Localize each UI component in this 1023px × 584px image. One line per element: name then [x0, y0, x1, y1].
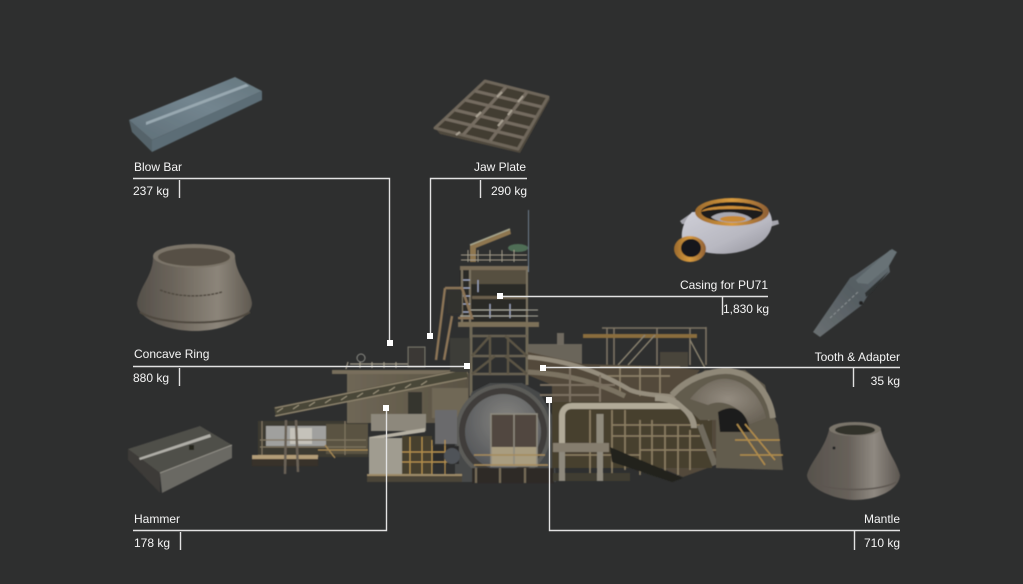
- white container buildings: [367, 414, 462, 482]
- icon: jaw plate: [435, 81, 550, 153]
- item: hammer: 178 kg: [134, 536, 170, 550]
- right ball mill: [672, 370, 783, 470]
- inclined conveyor: [275, 369, 467, 416]
- primary tower: [436, 210, 539, 396]
- left conveyor-side building and base: [252, 420, 368, 474]
- item: blow bar: Blow Bar: [134, 160, 182, 174]
- item: mantle: Mantle: [864, 512, 900, 526]
- item: tooth and adapter: [813, 249, 900, 388]
- icon: hammer: [128, 426, 232, 493]
- upper right structure: [528, 327, 706, 368]
- item: hammer: [128, 426, 232, 550]
- item: concave ring: 880 kg: [133, 371, 169, 385]
- icon: tooth and adapter: [813, 249, 897, 337]
- leader lines: [133, 178, 900, 550]
- icon: pump casing: [674, 198, 779, 262]
- item: casing for PU71: [674, 198, 779, 316]
- item: hammer: Hammer: [134, 512, 180, 526]
- item: jaw plate: 290 kg: [491, 184, 527, 198]
- tan bin building under deck: [332, 347, 469, 423]
- icon: mantle: [807, 422, 900, 500]
- central ball mill: [429, 383, 556, 483]
- icon: concave ring: [137, 244, 252, 331]
- item: concave ring: [133, 244, 252, 385]
- item: jaw plate: [435, 81, 550, 198]
- item: tooth and adapter: 35 kg: [871, 374, 900, 388]
- item: casing for PU71: Casing for PU71: [680, 278, 768, 292]
- item: tooth and adapter: Tooth & Adapter: [815, 350, 900, 364]
- marker squares: [383, 293, 552, 411]
- item: blow bar: 237 kg: [133, 184, 169, 198]
- item: jaw plate: Jaw Plate: [474, 160, 526, 174]
- right-side piping and frame: [528, 352, 731, 482]
- icon: blow bar: [129, 77, 262, 152]
- item: casing for PU71: 1,830 kg: [723, 302, 769, 316]
- item: blow bar: [129, 77, 262, 198]
- central processing plant: [252, 210, 783, 483]
- item: mantle: [807, 422, 900, 550]
- item: concave ring: Concave Ring: [134, 347, 209, 361]
- item: mantle: 710 kg: [864, 536, 900, 550]
